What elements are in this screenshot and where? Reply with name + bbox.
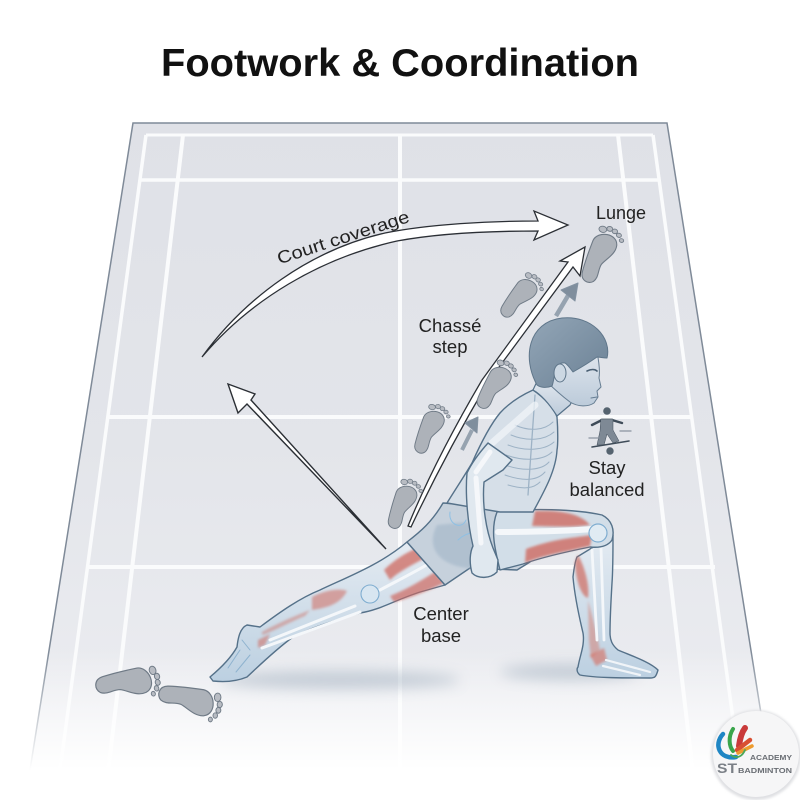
bottom fade bbox=[0, 650, 800, 770]
label: stay balanced: Stay bbox=[588, 457, 626, 478]
shin bones bbox=[592, 548, 604, 640]
hair bbox=[529, 318, 608, 387]
back leg muscles bbox=[258, 549, 444, 648]
icon: balance figure bbox=[589, 407, 631, 455]
figure: boy in lunge bbox=[210, 318, 658, 682]
label: court coverage: Court coverage bbox=[274, 206, 412, 268]
ribcage bbox=[505, 395, 554, 495]
label: chasse step: Chassé bbox=[419, 315, 481, 336]
torso bbox=[447, 390, 558, 512]
label: center base: base bbox=[421, 625, 461, 646]
logo badge: BADMINTON bbox=[738, 766, 792, 775]
arrow: court coverage bbox=[202, 211, 568, 357]
label: chasse step: step bbox=[433, 336, 467, 357]
title: Footwork & Coordination bbox=[161, 42, 639, 85]
small direction arrows bbox=[462, 283, 578, 450]
face bbox=[545, 343, 601, 406]
label: center base: Center bbox=[413, 603, 469, 624]
arrow: chasse path bbox=[408, 247, 585, 527]
footprints: chasse trail bbox=[387, 223, 626, 533]
shorts bbox=[407, 503, 533, 585]
neck bbox=[533, 375, 575, 416]
front thigh bbox=[494, 510, 613, 570]
court floor bbox=[30, 123, 770, 790]
eye bbox=[587, 370, 597, 371]
arrow: to center bbox=[228, 384, 386, 549]
label: lunge: Lunge bbox=[596, 203, 646, 223]
label: stay balanced: balanced bbox=[569, 479, 645, 500]
back leg bones bbox=[262, 563, 430, 648]
logo text: ACADEMY bbox=[750, 753, 792, 762]
logo badge bbox=[711, 710, 800, 800]
logo emblem bbox=[718, 728, 752, 757]
court border lines bbox=[30, 123, 770, 770]
front leg: shin and foot bbox=[573, 535, 658, 678]
head bbox=[529, 318, 608, 406]
logo badge: ST bbox=[717, 760, 738, 776]
ear bbox=[554, 364, 566, 382]
back leg bbox=[210, 542, 445, 682]
arm bbox=[466, 443, 512, 577]
mouth bbox=[591, 397, 597, 398]
ground shadow bbox=[220, 664, 640, 689]
calf muscle bbox=[575, 555, 588, 598]
footprints: start bbox=[94, 660, 223, 722]
